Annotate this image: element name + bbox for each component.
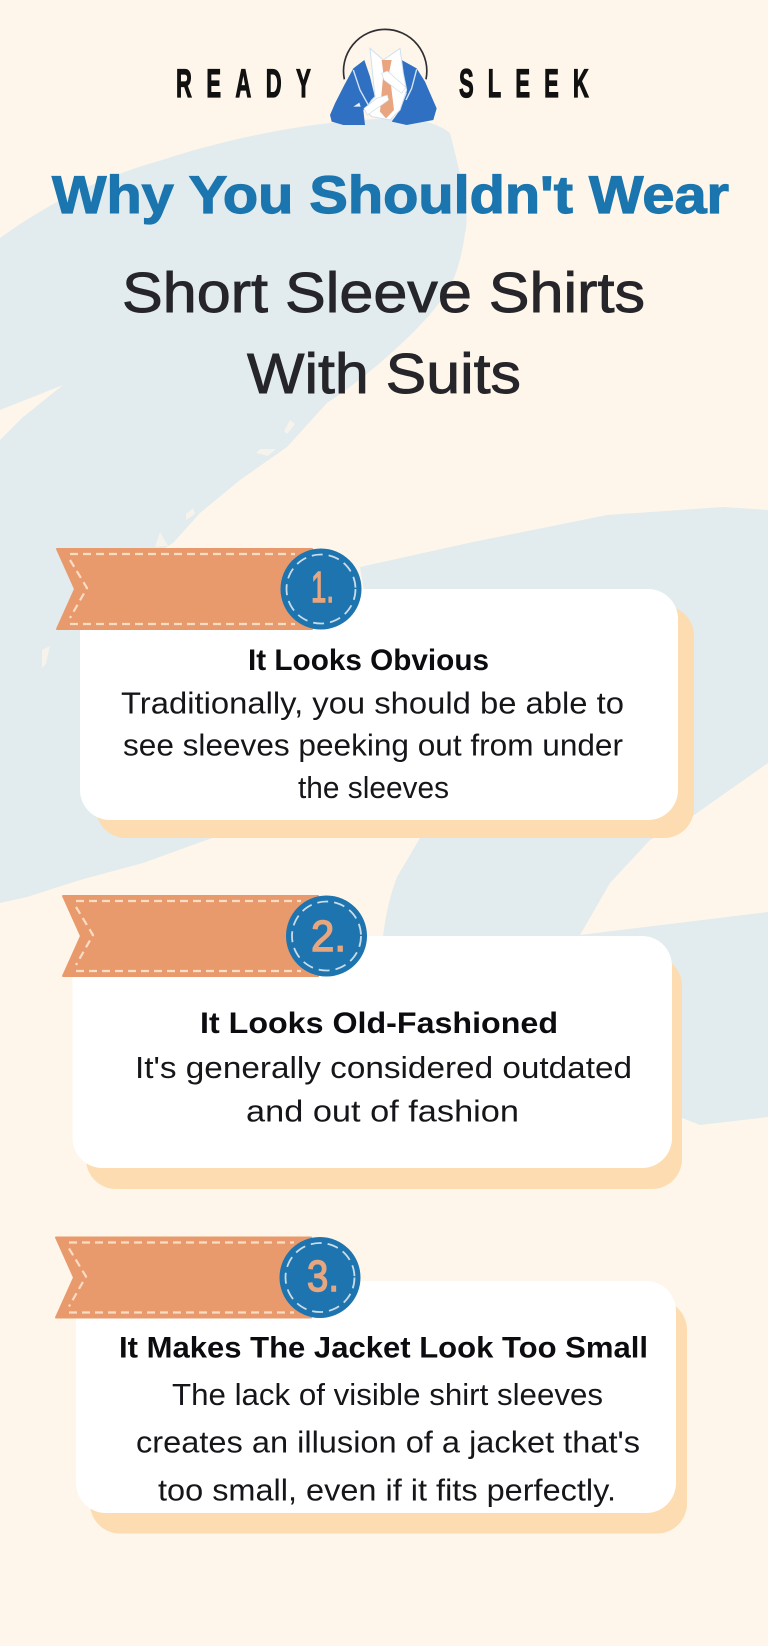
number badge 2: [286, 896, 367, 976]
card body: [72, 936, 672, 1168]
body text: [136, 1377, 640, 1508]
body text: creates an illusion of a jacket that's: [136, 1424, 640, 1460]
ribbon: [57, 549, 312, 629]
body text: [121, 686, 624, 805]
card body: [80, 589, 678, 820]
body text: [135, 1050, 632, 1128]
number badge 1: [280, 548, 362, 630]
number badge 3: [280, 1237, 360, 1318]
ribbon: [56, 1238, 311, 1318]
title: short sleeve shirts: Short Sleeve Shirts: [122, 261, 645, 325]
title: why you shouldn't wear: Why You Shouldn't Wear: [52, 166, 729, 225]
card shadow: [90, 1300, 687, 1534]
body text: and out of fashion: [246, 1094, 519, 1128]
logo wordmark: READY: READY: [176, 61, 311, 106]
heading: It Makes The Jacket Look Too Small: [119, 1332, 648, 1364]
logo wordmark: SLEEK: SLEEK: [459, 61, 589, 106]
body text: The lack of visible shirt sleeves: [172, 1377, 603, 1412]
body text: It's generally considered outdated: [135, 1050, 632, 1085]
body text: see sleeves peeking out from under: [123, 728, 623, 762]
panel: reason 3: [56, 1237, 687, 1534]
number badge 3: 3.: [307, 1252, 339, 1301]
body text: too small, even if it fits perfectly.: [158, 1472, 616, 1508]
body text: Traditionally, you should be able to: [121, 686, 624, 720]
heading: It Looks Old-Fashioned: [200, 1007, 558, 1040]
icon: suit jacket with tie: [330, 29, 437, 125]
ribbon: [63, 896, 318, 976]
card shadow: [86, 956, 682, 1189]
logo: [176, 29, 589, 125]
panel: reason 2: [63, 896, 682, 1189]
title: with suits: With Suits: [247, 342, 521, 406]
card body: [76, 1281, 676, 1513]
heading: It Looks Obvious: [248, 644, 489, 677]
number badge 2: 2.: [311, 912, 346, 961]
card shadow: [96, 606, 694, 838]
panel: reason 1: [57, 548, 694, 838]
body text: the sleeves: [298, 770, 449, 805]
number badge 1: 1.: [311, 563, 334, 612]
